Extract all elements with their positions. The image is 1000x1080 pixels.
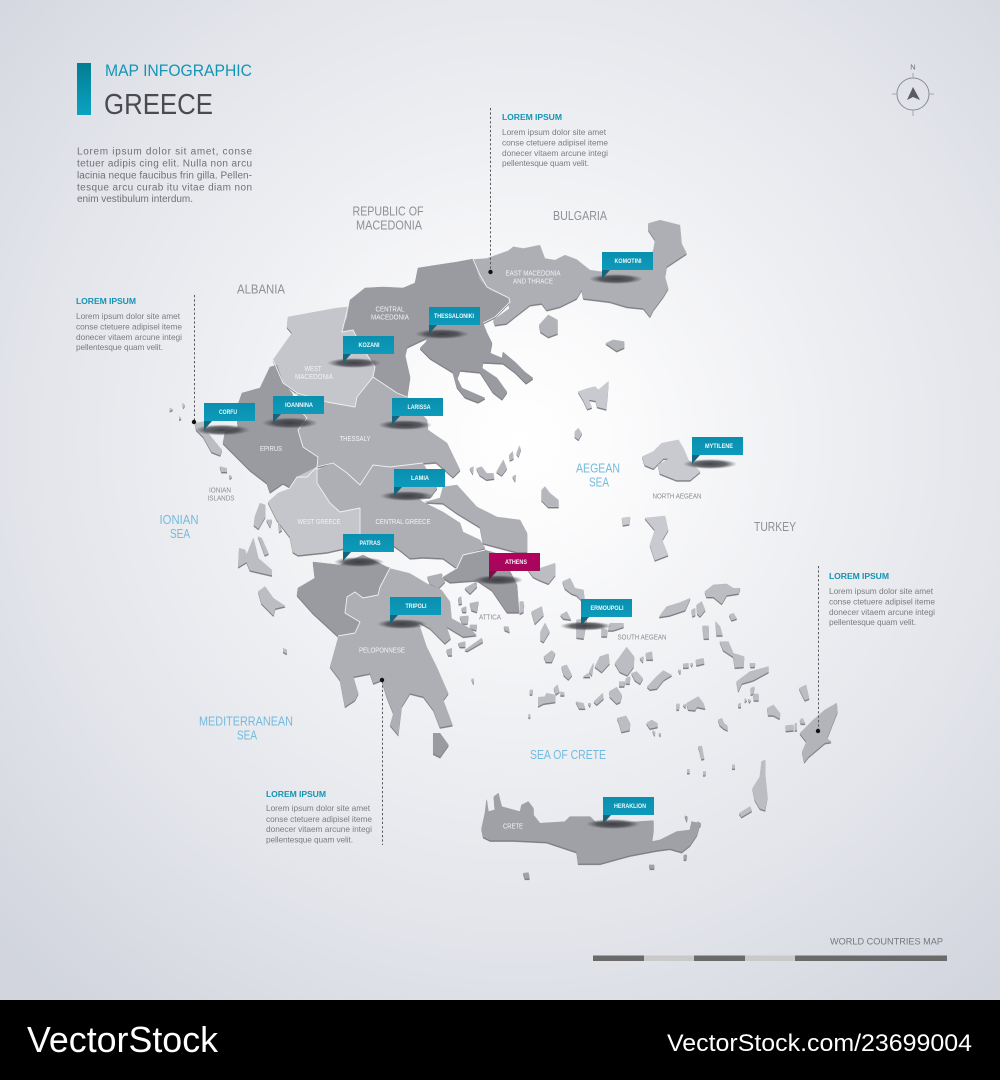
scale bar [593, 956, 947, 961]
callout: left: Lorem ipsum dolor site amet [76, 311, 181, 321]
region labels: WEST GREECE [298, 519, 341, 526]
callout: right: Lorem ipsum dolor site amet [829, 586, 934, 596]
accent bar [77, 63, 91, 115]
caption: world countries map: WORLD COUNTRIES MAP [830, 936, 943, 948]
pin: Corfu: CORFU [219, 409, 237, 416]
callout: top: pellentesque quam velit. [502, 158, 589, 168]
pin: Larissa [378, 398, 443, 430]
region: peloponnese [330, 568, 477, 735]
map of Greece [170, 220, 837, 878]
region: east macedonia and thrace [473, 220, 687, 325]
sea labels: MEDITERRANEAN [199, 714, 293, 728]
callout: right: pellentesque quam velit. [829, 617, 916, 627]
islands: ionian [238, 503, 474, 757]
pin: Ermoupoli: ERMOUPOLI [590, 605, 624, 612]
intro text: Lorem ipsum dolor sit amet, conse [77, 146, 252, 158]
islands: south aegean [520, 563, 837, 817]
callout: bottom [266, 678, 384, 845]
pin: Lamia: LAMIA [411, 475, 429, 482]
intro text: lacinia neque faucibus frin gilla. Pellen- [77, 170, 252, 182]
callout: left: pellentesque quam velit. [76, 342, 163, 352]
sea labels: SEA [237, 728, 258, 742]
intro text [77, 146, 252, 205]
region: crete [482, 793, 701, 878]
islands: saronic gulf [447, 582, 523, 655]
callout: top: donecer vitaem arcune integi [502, 148, 608, 158]
watermark footer [0, 1000, 1000, 1080]
region: west greece [268, 467, 360, 555]
region: euboea [425, 485, 527, 552]
country labels: MACEDONIA [356, 218, 423, 232]
callout: left: conse ctetuere adipisel iteme [76, 322, 182, 332]
region labels: SOUTH AEGEAN [618, 634, 666, 642]
pin: Kozani [327, 336, 394, 368]
intro text: enim vestibulum interdum. [77, 194, 193, 205]
region labels: PELOPONNESE [359, 648, 405, 654]
sea labels [160, 462, 620, 762]
callout: bottom: pellentesque quam velit. [266, 834, 353, 844]
region: attica [442, 550, 519, 612]
sea labels: SEA [170, 527, 191, 541]
country labels: ALBANIA [237, 282, 286, 296]
pin: Athens [473, 553, 540, 585]
islands: chios and psara [622, 516, 668, 560]
pin: Mytilene: MYTILENE [705, 443, 733, 450]
pin: Thessaloniki [415, 307, 480, 339]
callout: right [816, 566, 935, 733]
intro text: tesque arcu curab itu vitae diam non [77, 182, 252, 194]
sea labels: AEGEAN [576, 462, 620, 476]
callout: left: LOREM IPSUM [76, 296, 136, 306]
pin: Tripoli: TRIPOLI [406, 603, 427, 610]
callout: bottom: conse ctetuere adipisel iteme [266, 814, 372, 824]
pin: Lamia [380, 469, 445, 501]
region: west macedonia [273, 307, 375, 407]
region: central greece [317, 463, 485, 568]
region labels: NORTH AEGEAN [652, 494, 702, 500]
pin: Larissa: LARISSA [408, 404, 431, 411]
callout: top: conse ctetuere adipisel iteme [502, 138, 608, 148]
region labels: THESSALY [340, 436, 371, 443]
region labels: CENTRAL [376, 306, 405, 314]
region borders [273, 259, 510, 636]
country labels [237, 204, 797, 534]
region labels: MACEDONIA [371, 314, 409, 322]
callout: right: donecer vitaem arcune integi [829, 607, 935, 617]
pin: Patras: PATRAS [360, 540, 380, 547]
icon: compass [892, 62, 934, 116]
sea labels: SEA OF CRETE [530, 748, 606, 762]
region labels [208, 270, 702, 830]
icon: compass: N [910, 62, 916, 72]
country labels: TURKEY [754, 520, 797, 534]
pin: Ioannina: IOANNINA [285, 402, 313, 409]
intro text: tetuer adipis cing elit. Nulla non arcu [77, 158, 252, 170]
region labels: WEST [304, 366, 322, 373]
pin: Athens: ATHENS [505, 559, 527, 566]
region labels: IONIAN [209, 488, 231, 494]
sea labels: SEA [589, 476, 610, 490]
pin: Corfu [194, 403, 255, 436]
watermark footer: VectorStock.com/23699004 [667, 1030, 972, 1057]
pin: Tripoli [377, 597, 441, 629]
sea labels: IONIAN [160, 513, 198, 527]
region labels: ISLANDS [208, 496, 235, 502]
pin: Kozani: KOZANI [358, 342, 380, 349]
region labels: AND THRACE [513, 278, 553, 286]
region labels: EAST MACEDONIA [506, 270, 561, 278]
callout: bottom: donecer vitaem arcune integi [266, 824, 372, 834]
pin: Patras [334, 534, 394, 567]
island: corfu group [170, 403, 232, 478]
pin: Ioannina [262, 396, 324, 428]
islands: north aegean [470, 315, 700, 507]
pin: Komotini [589, 252, 653, 284]
region labels: EPIRUS [260, 446, 282, 453]
pin: Komotini: KOMOTINI [614, 258, 642, 265]
callout: right: LOREM IPSUM [829, 571, 889, 581]
callout: right: conse ctetuere adipisel iteme [829, 596, 935, 606]
title: MAP INFOGRAPHIC [105, 61, 252, 80]
region: epirus [223, 365, 318, 492]
country labels: BULGARIA [553, 209, 608, 223]
region labels: ATTICA [479, 614, 501, 622]
pin: Ermoupoli [560, 599, 632, 630]
callout: top: LOREM IPSUM [502, 112, 562, 122]
pin: Mytilene [683, 437, 743, 469]
callout: top: Lorem ipsum dolor site amet [502, 127, 607, 137]
region: west peloponnese [297, 555, 390, 636]
callout: left [76, 295, 196, 424]
callout: bottom: Lorem ipsum dolor site amet [266, 803, 371, 813]
pin: Heraklion [586, 797, 654, 829]
region: central macedonia [342, 259, 533, 402]
watermark footer: VectorStock [27, 1019, 219, 1060]
pin: Thessaloniki: THESSALONIKI [434, 313, 474, 320]
callout: left: donecer vitaem arcune integi [76, 332, 182, 342]
callout: top [488, 108, 608, 274]
title: GREECE [104, 89, 213, 121]
region labels: MACEDONIA [295, 374, 333, 381]
title [104, 61, 252, 121]
pin: Heraklion: HERAKLION [614, 803, 646, 810]
callout: bottom: LOREM IPSUM [266, 789, 326, 799]
region: thessaly [297, 377, 460, 485]
country labels: REPUBLIC OF [352, 204, 424, 218]
region labels: CRETE [503, 824, 523, 830]
region labels: CENTRAL GREECE [376, 519, 431, 526]
